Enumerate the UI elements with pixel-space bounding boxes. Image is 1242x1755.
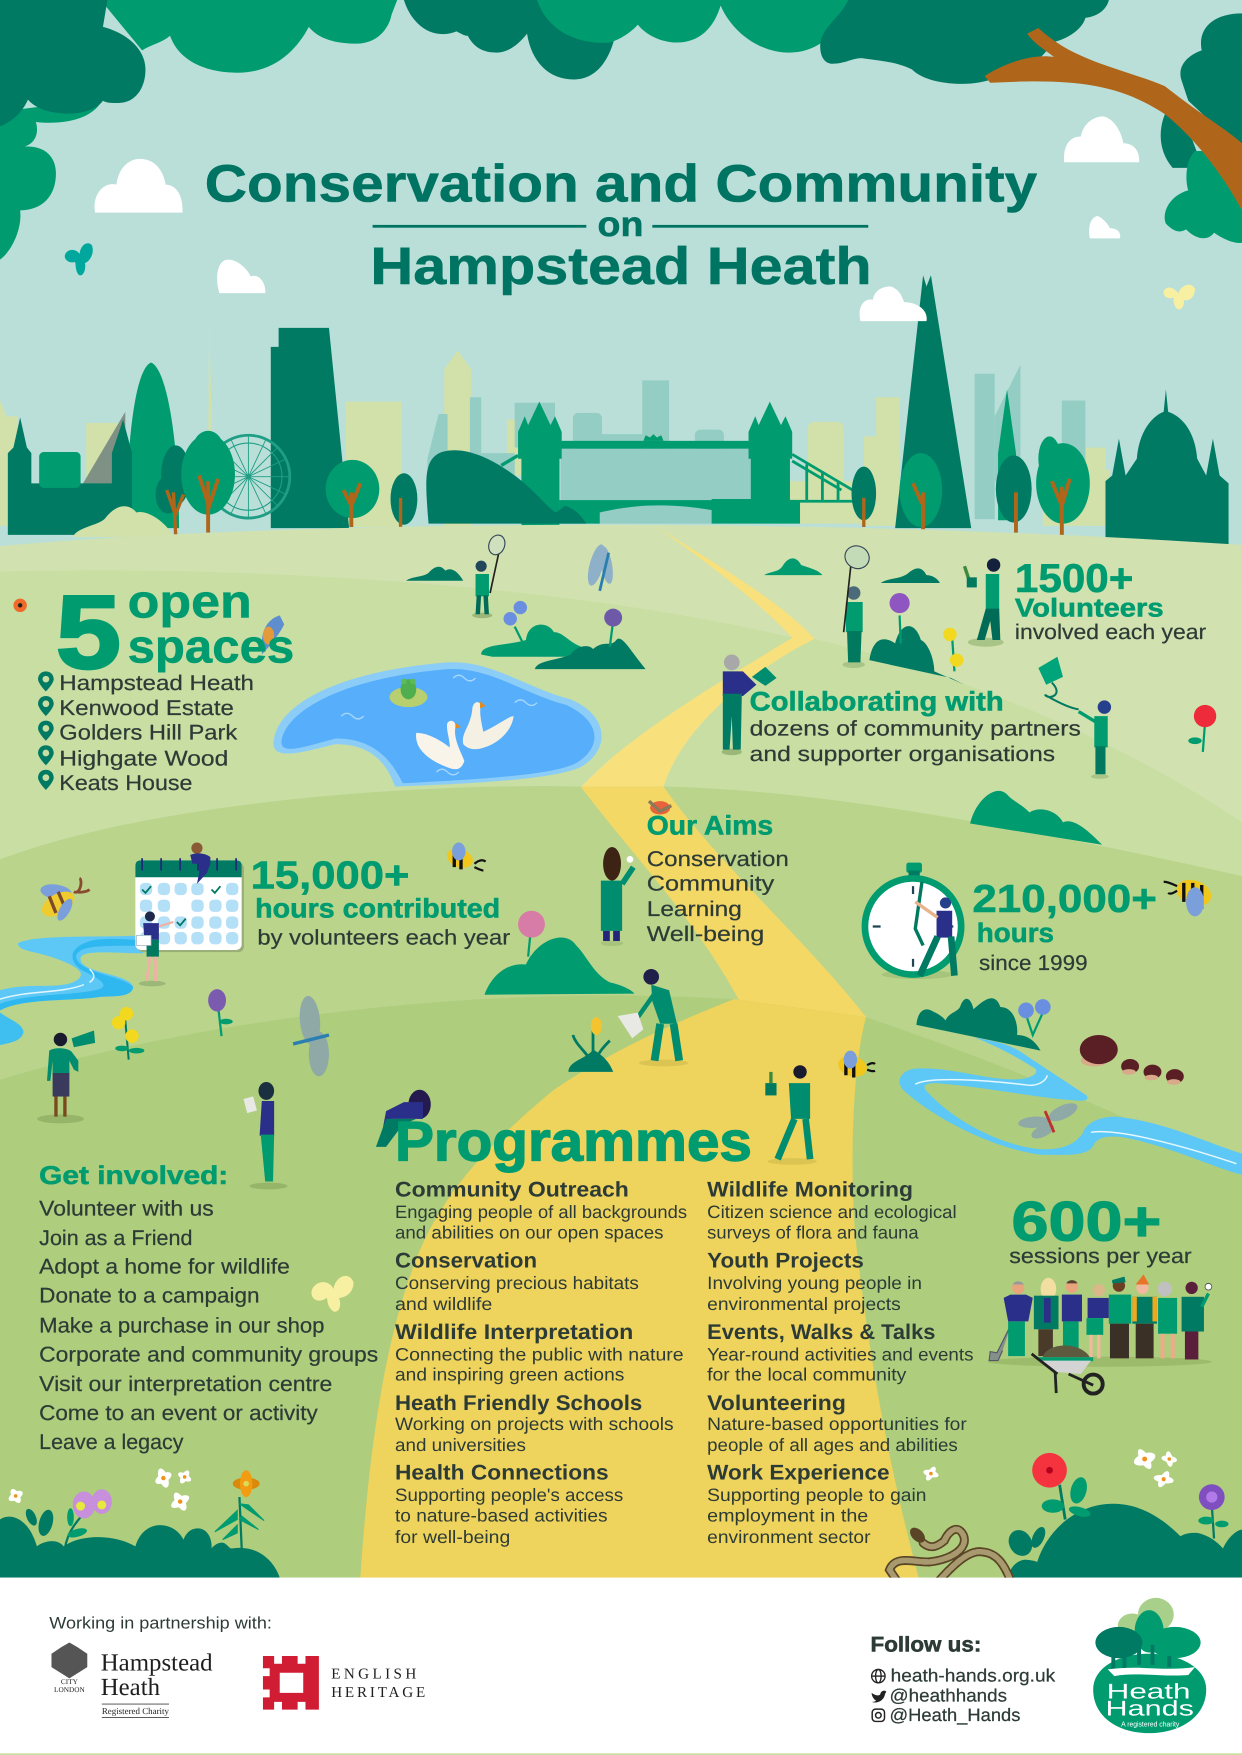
leaves right <box>1004 1525 1048 1560</box>
top canopy dark lobes right <box>820 0 1109 84</box>
blossom centres <box>14 1457 1171 1504</box>
health connections: to nature-based activities <box>395 1507 608 1526</box>
bush <box>881 568 940 583</box>
hill four <box>0 995 1242 1578</box>
right canopy dark lower <box>1161 112 1203 168</box>
skyline trees <box>156 431 1090 535</box>
stat: 600+ sessions <box>1009 1190 1192 1269</box>
our aims: Conservation <box>647 848 789 872</box>
open spaces list: Golders Hill Park <box>59 722 238 745</box>
purple flower <box>890 593 910 643</box>
work experience: Work Experience <box>707 1462 890 1485</box>
Gherkin tower <box>126 363 179 528</box>
lilac flower <box>65 1489 112 1549</box>
figure: gardener <box>618 969 688 1066</box>
events walks and talks: Year-round activities and events <box>707 1346 973 1365</box>
spade <box>989 1324 1011 1361</box>
bush <box>406 567 463 581</box>
Heath Hands logo: Heath <box>1107 1681 1191 1704</box>
teal butterfly <box>65 243 93 275</box>
Tower Bridge <box>501 402 800 526</box>
tree <box>391 473 417 527</box>
instagram icon <box>872 1709 885 1721</box>
bush <box>970 791 1102 845</box>
get involved list: Make a purchase in our shop <box>39 1315 324 1338</box>
open spaces list: Hampstead Heath <box>59 672 254 695</box>
right river <box>900 1037 1242 1175</box>
bush <box>481 625 591 657</box>
events walks and talks: for the local community <box>707 1366 906 1385</box>
butterfly pale <box>311 1276 354 1312</box>
figure: net volunteer <box>472 533 508 618</box>
yellow flower <box>112 1007 144 1060</box>
tree <box>326 460 379 527</box>
dark hill <box>426 450 586 524</box>
person <box>1004 1281 1033 1356</box>
open spaces list <box>38 671 254 796</box>
wildlife monitoring: surveys of flora and fauna <box>707 1224 919 1243</box>
City of London crest: CITY <box>61 1678 78 1686</box>
footer edge <box>0 1753 1242 1755</box>
programmes heading: Programmes <box>395 1110 752 1173</box>
stat: 1500+ volunteers: 1500+ <box>1015 555 1133 601</box>
blue flower <box>1018 999 1051 1035</box>
youth projects: Involving young people in <box>707 1274 922 1293</box>
City of London crest: LONDON <box>54 1686 85 1694</box>
social links: heath-hands.org.uk <box>891 1667 1056 1686</box>
figure: volunteer with plant <box>965 558 1004 647</box>
stat: 1500+ volunteers <box>1015 555 1207 644</box>
Heath Hands logo: A registered charity <box>1121 1721 1180 1729</box>
programmes left column <box>395 1179 687 1547</box>
English Heritage logo <box>263 1656 425 1710</box>
work experience: Supporting people to gain <box>707 1486 926 1505</box>
small creatures <box>13 543 1215 1141</box>
heath friendly schools: and universities <box>395 1437 526 1456</box>
bottom right bushes <box>1008 1504 1242 1578</box>
title line one: Conservation and Community <box>205 153 1037 213</box>
bee <box>38 878 90 923</box>
conservation: and wildlife <box>395 1296 492 1315</box>
our aims: Learning <box>647 898 742 921</box>
wildlife interpretation: Connecting the public with nature <box>395 1346 684 1365</box>
programmes right column <box>707 1179 973 1547</box>
conservation: Conservation <box>395 1250 537 1273</box>
frog on lily pad <box>389 679 427 707</box>
upper path <box>581 526 815 788</box>
youth projects: environmental projects <box>707 1296 901 1315</box>
hill three <box>0 786 1242 1343</box>
social links: @heathhands <box>890 1687 1007 1706</box>
Hampstead Heath logo: Hampstead <box>101 1648 213 1676</box>
top canopy dark lobes <box>404 0 627 79</box>
left canopy dark <box>0 0 145 126</box>
cloud <box>1064 116 1139 162</box>
dragonfly <box>1018 1099 1080 1141</box>
Heath Hands logo: Hands <box>1105 1697 1194 1721</box>
green block building <box>39 452 81 488</box>
wildlife monitoring: Wildlife Monitoring <box>707 1179 913 1202</box>
bee <box>836 1051 875 1080</box>
health connections: for well-being <box>395 1528 510 1547</box>
swans <box>416 702 514 769</box>
wildlife monitoring: Citizen science and ecological <box>707 1203 957 1222</box>
English Heritage logo: ENGLISH <box>331 1665 417 1682</box>
get involved list: Join as a Friend <box>39 1227 192 1250</box>
yellow butterfly <box>1164 285 1195 309</box>
English Heritage logo: HERITAGE <box>331 1683 425 1700</box>
twitter icon <box>872 1691 886 1703</box>
right canopy dark <box>1180 13 1242 151</box>
Hampstead Heath logo: Heath <box>101 1673 160 1701</box>
get involved list: Donate to a campaign <box>39 1285 260 1308</box>
bottom left bushes <box>0 1517 280 1578</box>
tree <box>181 431 235 533</box>
wildlife monitoring <box>707 1179 957 1243</box>
stat: 210,000+ hours: 210,000+ <box>972 877 1157 921</box>
community outreach <box>395 1179 687 1243</box>
figure: woman with laptop <box>376 1090 431 1147</box>
get involved list: Come to an event or activity <box>39 1402 318 1425</box>
stopwatch <box>865 863 961 979</box>
stat: collaborating with partners <box>750 687 1081 766</box>
events walks and talks <box>707 1321 973 1385</box>
calendar with volunteers <box>135 843 244 986</box>
work experience: employment in the <box>707 1507 868 1526</box>
get involved list: Corporate and community groups <box>39 1344 378 1367</box>
bush <box>764 558 822 575</box>
clouds <box>95 116 1139 321</box>
community outreach: Community Outreach <box>395 1179 629 1202</box>
get involved list: Volunteer with us <box>39 1198 214 1221</box>
Cheesegrater tower <box>271 328 349 528</box>
tree <box>996 455 1032 533</box>
community outreach: and abilities on our open spaces <box>395 1224 664 1243</box>
conservation <box>395 1250 639 1315</box>
volunteering: people of all ages and abilities <box>707 1437 958 1456</box>
London Eye <box>207 435 290 518</box>
kingfisher <box>262 615 284 655</box>
youth projects <box>707 1250 922 1315</box>
social links: Follow us: <box>871 1634 981 1657</box>
dragonfly <box>584 543 615 591</box>
butterflies <box>65 243 1195 309</box>
bush <box>916 998 1041 1051</box>
gray triangular tower <box>82 412 125 486</box>
health connections <box>395 1462 623 1547</box>
middle path <box>581 787 866 1052</box>
hedgehog family <box>1080 1035 1184 1085</box>
ladybird <box>13 599 27 612</box>
bee <box>1164 875 1215 916</box>
stat: collaborating with partners: and supporter organisations <box>750 743 1055 766</box>
get involved list: Visit our interpretation centre <box>39 1373 332 1396</box>
numeral 5: 5 <box>56 574 121 690</box>
yellow flower <box>943 628 963 671</box>
figure: megaphone speaker <box>37 1031 95 1123</box>
logo badge <box>1093 1654 1206 1733</box>
person <box>1109 1277 1131 1358</box>
heath friendly schools: Working on projects with schools <box>395 1415 674 1434</box>
figure: kite flyer <box>1038 657 1111 779</box>
sky background <box>0 0 1242 582</box>
tree <box>1036 436 1090 535</box>
cloud <box>217 260 265 293</box>
London skyline <box>0 275 1229 545</box>
work experience: environment sector <box>707 1528 871 1547</box>
title line two: Hampstead Heath <box>370 236 872 295</box>
conservation: Conserving precious habitats <box>395 1274 639 1293</box>
volunteer group with wheelbarrow <box>988 1274 1212 1394</box>
the Shard <box>895 275 971 528</box>
logo trees <box>1095 1598 1201 1669</box>
bush <box>484 937 634 995</box>
hill two <box>0 570 1242 1119</box>
figure on calendar <box>190 843 210 884</box>
person <box>1034 1278 1058 1356</box>
top canopy light lobes left <box>101 0 397 73</box>
garden plant <box>573 1017 610 1065</box>
volunteering <box>707 1392 968 1456</box>
bee <box>444 843 486 871</box>
get involved list: Adopt a home for wildlife <box>39 1255 290 1279</box>
tree <box>156 445 190 535</box>
location pins <box>38 671 54 790</box>
title block <box>205 153 1037 295</box>
teal background buildings <box>427 365 1085 524</box>
stat: collaborating with partners: dozens of community partners <box>750 718 1081 741</box>
pale bushes <box>73 506 173 537</box>
volunteering: Nature-based opportunities for <box>707 1415 968 1434</box>
stat: 15,000+ hours: by volunteers each year <box>257 926 511 950</box>
open: open <box>128 575 252 628</box>
heath friendly schools: Heath Friendly Schools <box>395 1392 642 1415</box>
Tower of London <box>8 417 132 535</box>
health connections: Supporting people's access <box>395 1486 623 1505</box>
stat: 600+ sessions: 600+ <box>1011 1190 1161 1253</box>
red castle mark <box>263 1656 319 1710</box>
leaves left <box>23 1507 56 1538</box>
Heath Hands logo <box>1093 1598 1206 1733</box>
bushes <box>406 558 1102 1072</box>
stat: 15,000+ hours: 15,000+ <box>251 854 410 897</box>
left river <box>0 935 143 1045</box>
bush <box>535 639 646 669</box>
figure at calendar <box>137 911 173 986</box>
person <box>1132 1274 1157 1358</box>
figure: woman watering <box>722 655 777 755</box>
youth projects: Youth Projects <box>707 1250 864 1273</box>
purple flower <box>604 609 622 647</box>
stat: 210,000+ hours: hours <box>977 919 1054 949</box>
events walks and talks: Events, Walks & Talks <box>707 1321 935 1344</box>
stat: 15,000+ hours <box>251 854 511 950</box>
globe icon <box>872 1669 885 1683</box>
wildlife interpretation: Wildlife Interpretation <box>395 1321 633 1344</box>
title word on: on <box>598 205 643 244</box>
bush <box>568 1050 613 1072</box>
headline: 5 open spaces <box>56 574 294 690</box>
heath friendly schools <box>395 1392 674 1456</box>
volunteering: Volunteering <box>707 1392 846 1415</box>
community outreach: Engaging people of all backgrounds <box>395 1203 687 1222</box>
person <box>1158 1282 1177 1358</box>
rule right <box>652 225 868 228</box>
cloud <box>860 286 927 321</box>
wheelbarrow <box>1032 1345 1103 1394</box>
spaces: spaces <box>128 620 294 672</box>
lower path <box>360 999 919 1578</box>
figure: scientist <box>601 847 633 946</box>
pink flower <box>518 911 545 957</box>
right canopy light <box>1165 151 1242 243</box>
red flower <box>1032 1453 1092 1519</box>
person <box>1062 1280 1082 1348</box>
dragonfly <box>293 995 329 1076</box>
stat: 210,000+ hours <box>972 877 1157 976</box>
tree canopy <box>0 0 1242 260</box>
figure: woman reading <box>243 1082 288 1189</box>
stat: 600+ sessions: sessions per year <box>1009 1245 1192 1269</box>
stat: 210,000+ hours: since 1999 <box>979 952 1088 976</box>
white blossoms <box>7 1447 1178 1513</box>
our aims: Community <box>647 873 775 896</box>
stat: 15,000+ hours: hours contributed <box>255 894 500 924</box>
tree <box>851 467 876 527</box>
person <box>1086 1284 1109 1358</box>
figure: man with plant <box>765 1065 817 1165</box>
wildlife interpretation: and inspiring green actions <box>395 1366 624 1385</box>
bottom flowers <box>7 1447 1229 1560</box>
oak branch <box>985 28 1242 210</box>
get involved list: Leave a legacy <box>39 1431 184 1455</box>
get involved list <box>39 1160 378 1455</box>
work experience <box>707 1462 926 1547</box>
cloud <box>95 159 183 213</box>
violet flower <box>208 989 233 1036</box>
tree <box>900 453 942 529</box>
Hampstead Heath logo <box>51 1643 213 1718</box>
cloud <box>1089 216 1120 238</box>
footer band <box>0 1578 1242 1753</box>
social links <box>871 1634 1056 1725</box>
wildlife interpretation <box>395 1321 684 1385</box>
get involved list: Get involved: <box>39 1160 228 1189</box>
open spaces list: Highgate Wood <box>59 747 228 771</box>
our aims: Well-being <box>647 923 764 947</box>
stat: 1500+ volunteers: involved each year <box>1015 621 1207 644</box>
pond <box>274 662 602 787</box>
Gothic spire <box>998 389 1018 520</box>
person <box>1182 1282 1212 1359</box>
runner on clock <box>915 897 954 976</box>
rule left <box>373 225 586 228</box>
Hampstead Heath logo: Registered Charity <box>102 1706 169 1716</box>
purple flower <box>1198 1484 1229 1538</box>
our aims <box>647 811 789 947</box>
partnership label: Working in partnership with: <box>49 1614 272 1633</box>
left river lower bend <box>0 1013 24 1045</box>
figure: net volunteer right <box>841 542 873 668</box>
blue flower <box>504 601 527 649</box>
logo white band <box>1108 1667 1195 1676</box>
flowers <box>112 593 1216 1065</box>
pale background buildings <box>0 314 1110 527</box>
stat: collaborating with partners: Collaborating with <box>750 687 1004 717</box>
top canopy light lobes centre <box>537 0 848 53</box>
health connections: Health Connections <box>395 1462 609 1485</box>
City of London crest <box>51 1643 87 1694</box>
orange flower <box>215 1470 264 1549</box>
snake <box>890 1525 1010 1580</box>
hill one <box>0 525 1242 1119</box>
red flower <box>1188 705 1216 752</box>
left canopy light <box>0 98 103 260</box>
our aims: Our Aims <box>647 811 773 841</box>
robin <box>649 801 671 815</box>
St Paul's Cathedral <box>1105 389 1229 545</box>
open spaces list: Keats House <box>59 772 192 796</box>
stat: 1500+ volunteers: Volunteers <box>1015 593 1164 622</box>
open spaces list: Kenwood Estate <box>59 697 234 721</box>
bush <box>869 626 965 685</box>
Tower Bridge side span <box>790 454 856 501</box>
social links: @Heath_Hands <box>890 1706 1020 1725</box>
